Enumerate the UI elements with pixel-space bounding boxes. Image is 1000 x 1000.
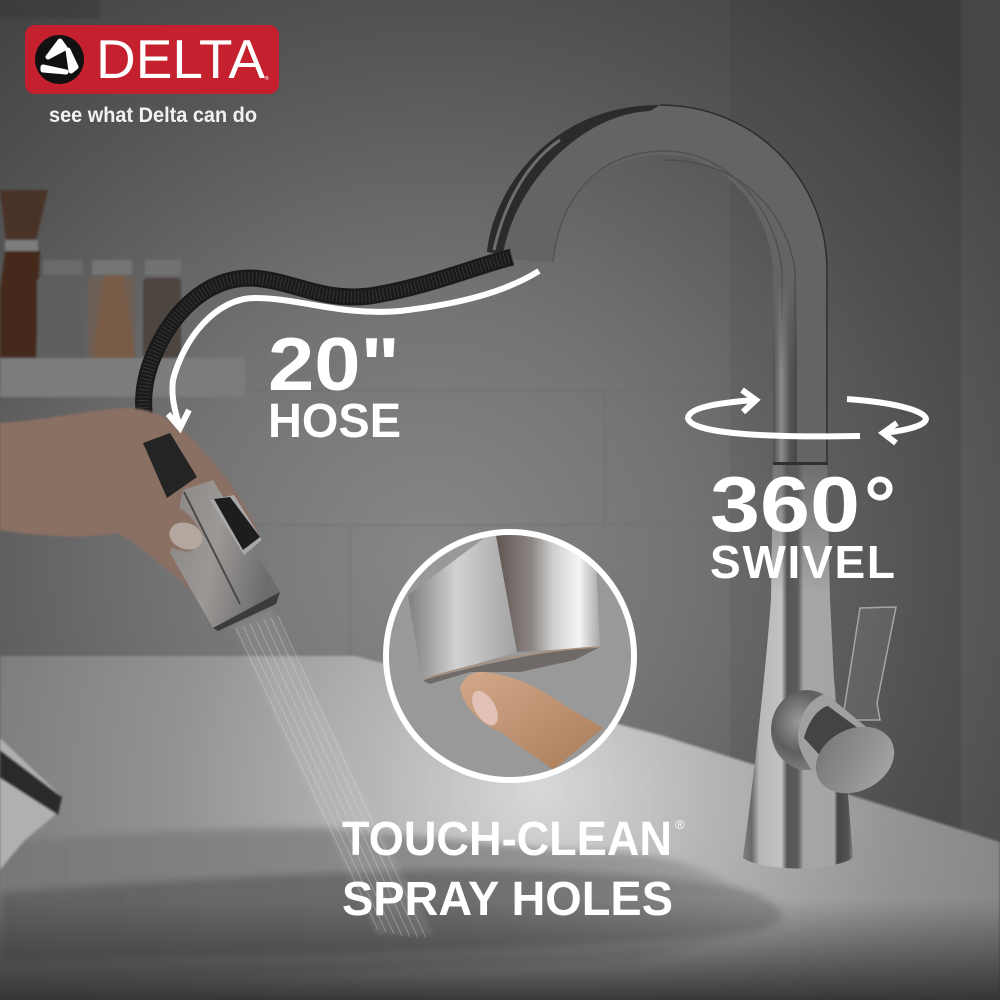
label: touch-clean spray holes: SPRAY HOLES — [342, 873, 673, 926]
nozzle close-up — [408, 530, 600, 684]
towel at left edge — [0, 738, 62, 870]
faucet neck — [773, 280, 797, 465]
tagline: see what Delta can do — [49, 104, 257, 127]
sprayer head — [170, 480, 280, 631]
spray water — [232, 610, 434, 938]
label: 360 swivel: SWIVEL — [710, 536, 895, 588]
faucet lever — [842, 607, 896, 720]
thumb nail — [166, 518, 206, 554]
swivel arrows — [688, 390, 926, 443]
icon: Delta triangle mark — [35, 35, 84, 84]
label: touch-clean spray holes: TOUCH-CLEAN — [342, 813, 672, 866]
faucet body — [743, 465, 853, 868]
label: 360 swivel: 360 — [710, 460, 860, 548]
finger close-up — [460, 672, 603, 770]
hose — [144, 257, 512, 440]
label: 360 swivel: ° — [864, 460, 896, 548]
label: 20 inch hose: HOSE — [268, 395, 401, 448]
kitchen shelf with jars — [0, 190, 245, 397]
hand holding sprayer — [0, 408, 280, 631]
faucet — [487, 105, 906, 868]
logo: Delta — [25, 25, 279, 94]
hose coupling — [143, 433, 197, 498]
label: touch-clean spray holes: ® — [675, 817, 685, 832]
label: touch-clean spray holes — [342, 813, 685, 926]
label: 360 swivel — [710, 460, 896, 588]
faucet spout arc — [487, 105, 827, 465]
callout: touch-clean close-up — [386, 530, 634, 780]
thumb — [128, 490, 203, 552]
label: 20 inch hose — [268, 322, 401, 448]
countertop and sink — [0, 656, 1000, 1000]
sink rim — [0, 828, 800, 985]
fingernail — [472, 690, 498, 726]
sink bowl — [0, 870, 782, 962]
logo: Delta: ® — [265, 75, 269, 82]
hose length arrow — [168, 271, 539, 428]
logo: Delta: DELTA — [96, 28, 265, 90]
label: 20 inch hose: 20" — [268, 322, 400, 406]
faucet handle — [771, 690, 906, 806]
